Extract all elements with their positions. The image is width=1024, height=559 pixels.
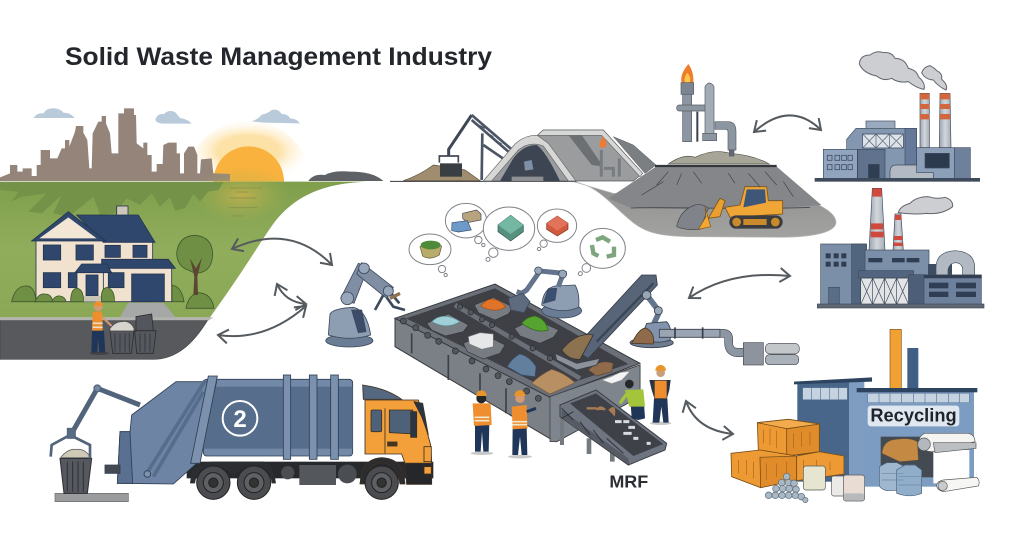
chassis [187, 462, 433, 485]
landfill mound [608, 152, 821, 209]
crane and soil [403, 115, 532, 181]
roofs [77, 215, 155, 242]
pebble pile [765, 473, 808, 503]
panel: collection truck [51, 375, 433, 502]
cab [360, 385, 432, 484]
windows [43, 245, 164, 302]
number badge [223, 401, 257, 436]
bulldozer [677, 187, 783, 230]
lifting arm [51, 385, 140, 458]
distant dark hill [308, 171, 383, 181]
house [32, 206, 175, 302]
tree [177, 235, 213, 295]
processing shed [483, 130, 656, 181]
skyline reflection [0, 182, 223, 217]
landfill ground [573, 182, 836, 237]
ground slab [55, 493, 128, 502]
icon: recycle [592, 237, 614, 257]
robot arm [326, 263, 405, 347]
road and curb [0, 303, 213, 359]
robot two [508, 267, 582, 318]
panel: power plants [815, 52, 984, 308]
recycling sign: Recycling [870, 405, 957, 426]
small flare [601, 150, 619, 177]
recycling building [794, 377, 977, 487]
smoke clouds top [859, 52, 947, 90]
thought bubbles [409, 203, 625, 277]
chain rollers [400, 304, 553, 401]
output pipe [720, 329, 799, 365]
worker with bins [89, 301, 156, 355]
rubbish bins [110, 331, 134, 353]
wheels [197, 466, 398, 499]
icon: organic bowl [420, 243, 442, 258]
worker A [471, 390, 493, 455]
paper rolls [918, 433, 979, 492]
title: Solid Waste Management Industry [65, 43, 492, 71]
green land [0, 182, 367, 317]
lower factory [817, 188, 984, 308]
cans [803, 466, 865, 501]
walls [36, 240, 153, 302]
worker B [508, 390, 536, 458]
icon: box and bag [463, 210, 481, 223]
upper factory [815, 93, 980, 181]
city skyline [0, 108, 230, 181]
bin [60, 449, 92, 493]
bubble icons [420, 210, 614, 258]
conveyor lower [560, 390, 667, 465]
arrow: flare and power plant [754, 115, 821, 132]
worker D [649, 365, 671, 425]
clouds [33, 108, 300, 124]
number badge: 2 [233, 406, 247, 433]
bushes [12, 285, 214, 308]
plastic bag [603, 372, 629, 383]
land glow [192, 167, 292, 223]
sun [187, 120, 310, 182]
compactor body [105, 375, 353, 484]
gas flare stack [677, 64, 736, 156]
sorting machine [395, 284, 640, 442]
lower factory smoke [898, 197, 953, 214]
workers [471, 365, 671, 458]
sorting trays [427, 297, 613, 394]
water lines [228, 188, 262, 216]
bales [731, 419, 844, 488]
chute arm [555, 275, 720, 370]
arrows: MRF to plants and recycling [686, 275, 790, 434]
horizon line [390, 180, 577, 183]
panel: recycling plant and products [720, 329, 979, 503]
porch step [79, 296, 103, 302]
MRF label: MRF [609, 471, 648, 491]
panel: city and residential landscape [0, 108, 405, 359]
worker C [620, 380, 645, 420]
stacks [890, 329, 901, 389]
chimney [117, 206, 128, 216]
icon: red stack [547, 216, 568, 236]
icon: green stack [498, 215, 523, 241]
panel: landfill and flare [390, 64, 836, 237]
panel: material recovery facility [395, 203, 720, 491]
bottles [879, 463, 922, 496]
arrows: home and robot [218, 239, 332, 336]
